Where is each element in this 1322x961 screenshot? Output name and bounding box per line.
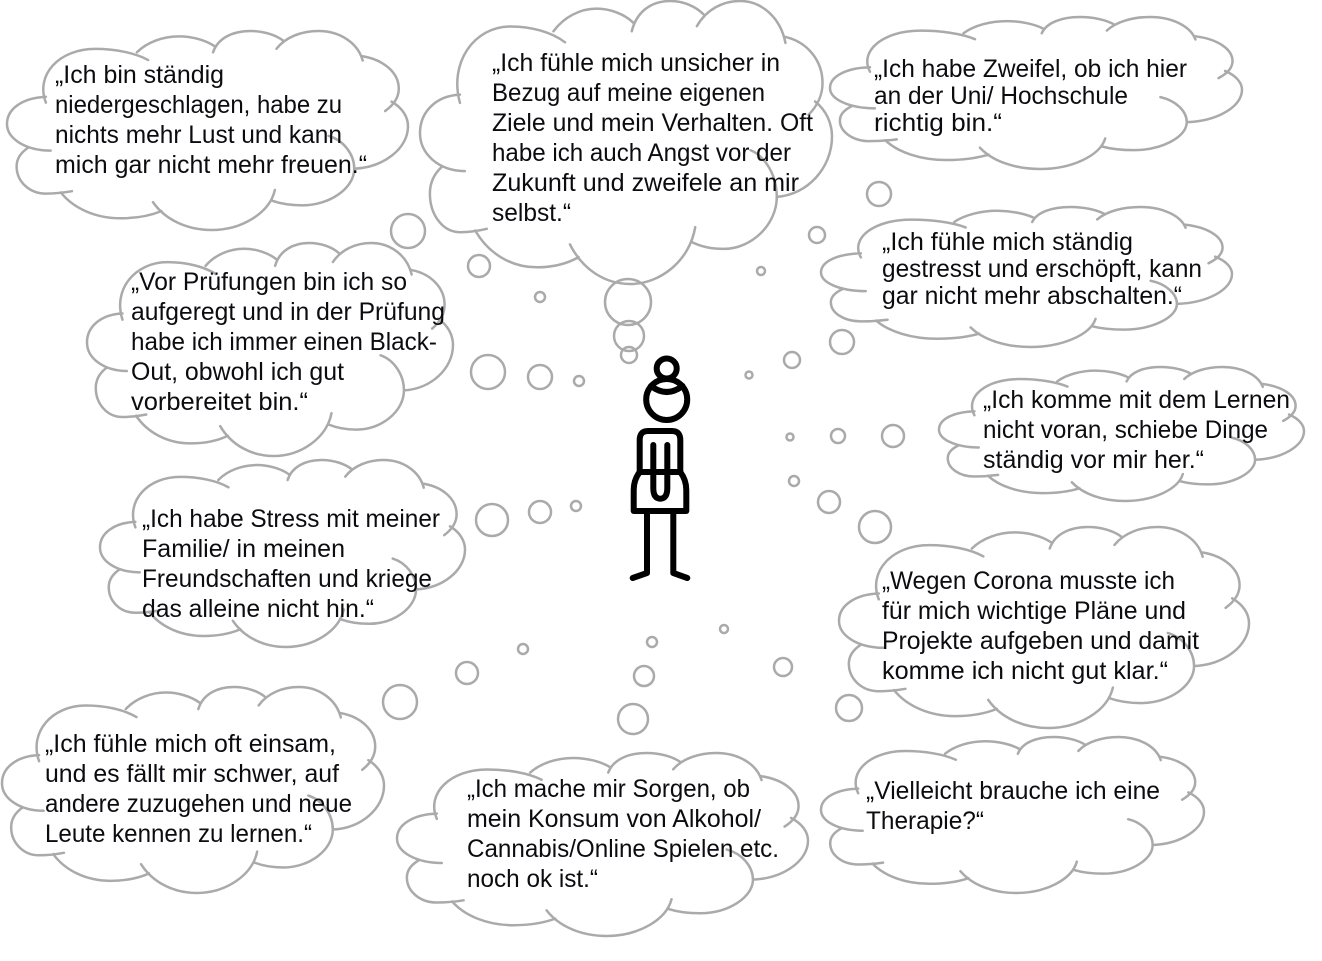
thought cloud: Familie: Freundschaften und kriege: [142, 565, 432, 593]
thought cloud: niedergeschlagen: nichts mehr Lust und kann: [55, 121, 342, 149]
thought cloud: unsicher: Zukunft und zweifele an mir: [492, 169, 799, 197]
thought cloud: einsam: andere zuzugehen und neue: [45, 790, 352, 818]
thought bubbles: bottom centre trail: [618, 637, 657, 734]
thought cloud: Prüfungen: „Vor Prüfungen bin ich so: [131, 268, 407, 296]
thought cloud: Corona: Projekte aufgeben und damit: [882, 627, 1199, 655]
thought cloud: Familie: Familie/ in meinen: [142, 535, 345, 563]
thought cloud: Lernen: ständig vor mir her.“: [983, 446, 1204, 474]
thought cloud: Therapie: Therapie?“: [866, 807, 984, 835]
thought cloud: Konsum: mein Konsum von Alkohol/: [467, 805, 761, 833]
thought cloud: Familie: „Ich habe Stress mit meiner: [142, 505, 440, 533]
thought cloud: Familie: [100, 460, 465, 647]
thought bubbles: middle left trail: [476, 501, 581, 536]
thought cloud: Corona: [839, 527, 1249, 728]
thought cloud: niedergeschlagen: „Ich bin ständig: [55, 61, 224, 89]
thought bubbles: lower left trail: [383, 644, 528, 719]
thought cloud: Prüfungen: Out, obwohl ich gut: [131, 358, 344, 386]
thought cloud: Konsum: „Ich mache mir Sorgen, ob: [467, 775, 750, 803]
thought cloud: niedergeschlagen: mich gar nicht mehr freuen.“: [55, 151, 367, 179]
thought cloud: Prüfungen: vorbereitet bin.“: [131, 388, 308, 416]
thought bubbles: middle right trail: [786, 425, 904, 447]
thought cloud: Corona: für mich wichtige Pläne und: [882, 597, 1186, 625]
thought cloud: Konsum: noch ok ist.“: [467, 865, 598, 893]
thought cloud: unsicher: Bezug auf meine eigenen: [492, 79, 765, 107]
thought cloud: Therapie: [821, 737, 1204, 893]
thought cloud: niedergeschlagen: niedergeschlagen, habe zu: [55, 91, 342, 119]
thought cloud: Lernen: nicht voran, schiebe Dinge: [983, 416, 1268, 444]
thought cloud: Familie: das alleine nicht hin.“: [142, 595, 374, 623]
thought cloud: gestresst: [821, 207, 1232, 347]
thought cloud: Lernen: [939, 367, 1304, 501]
thought cloud: Lernen: „Ich komme mit dem Lernen: [983, 386, 1290, 414]
person figure: [633, 358, 687, 578]
thought bubbles: lower right trail: [789, 476, 891, 543]
thought bubbles: bottom right trail: [720, 625, 862, 721]
thought bubbles: upper right trail: [757, 182, 891, 275]
thought cloud: Prüfungen: aufgeregt und in der Prüfung: [131, 298, 445, 326]
thought cloud: Corona: komme ich nicht gut klar.“: [882, 657, 1168, 685]
thought cloud: Konsum: [397, 753, 808, 936]
thought cloud: Zweifel: [830, 17, 1242, 169]
thought cloud: unsicher: Ziele und mein Verhalten. Oft: [492, 109, 813, 137]
thought bubbles: right trail: [746, 330, 854, 378]
thought cloud: einsam: „Ich fühle mich oft einsam,: [45, 730, 336, 758]
thought cloud: gestresst: gestresst und erschöpft, kann: [882, 255, 1202, 283]
thought cloud: gestresst: gar nicht mehr abschalten.“: [882, 282, 1182, 310]
thought cloud: Prüfungen: [87, 243, 453, 456]
thought cloud: einsam: [2, 687, 384, 893]
thought cloud: Therapie: „Vielleicht brauche ich eine: [866, 777, 1160, 805]
thought cloud: unsicher: habe ich auch Angst vor der: [492, 139, 791, 167]
thought cloud: unsicher: „Ich fühle mich unsicher in: [492, 49, 780, 77]
thought cloud: Zweifel: an der Uni/ Hochschule: [874, 82, 1128, 110]
thought cloud: Konsum: Cannabis/Online Spielen etc.: [467, 835, 779, 863]
thought cloud: einsam: Leute kennen zu lernen.“: [45, 820, 312, 848]
thought cloud: Zweifel: richtig bin.“: [874, 109, 1002, 137]
thought bubbles: top centre trail: [605, 279, 651, 363]
thought cloud: unsicher: [420, 1, 832, 284]
thought cloud: einsam: und es fällt mir schwer, auf: [45, 760, 339, 788]
thought cloud: Corona: „Wegen Corona musste ich: [882, 567, 1175, 595]
thought cloud: Prüfungen: habe ich immer einen Black-: [131, 328, 437, 356]
thought bubbles: left trail: [471, 355, 584, 389]
thought cloud: niedergeschlagen: [7, 31, 408, 230]
thought cloud: gestresst: „Ich fühle mich ständig: [882, 228, 1133, 256]
thought cloud: unsicher: selbst.“: [492, 199, 571, 227]
thought cloud: Zweifel: „Ich habe Zweifel, ob ich hier: [874, 55, 1187, 83]
thought bubbles: upper left trail: [391, 214, 545, 302]
